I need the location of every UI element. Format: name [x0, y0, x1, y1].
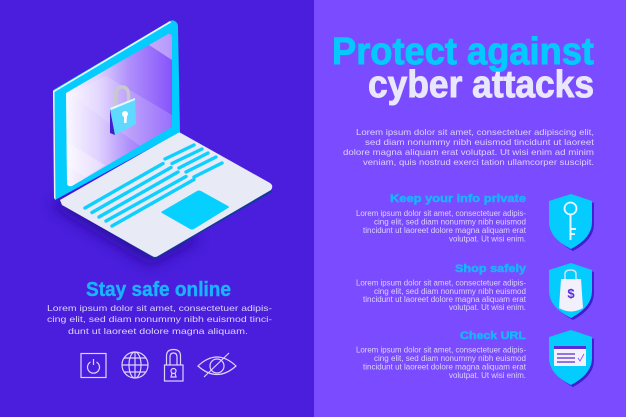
illustration: isometric laptop — [50, 20, 272, 265]
panel: left background — [0, 0, 314, 417]
text block: intro paragraph: Lorem ipsum dolor sit amet, consectetuer adipiscing elit, — [356, 127, 594, 137]
item heading: Keep your info private — [390, 193, 526, 205]
text block: left paragraph: dunt ut laoreet dolore magna aliquam. — [68, 326, 248, 336]
item: check url — [356, 330, 594, 387]
item heading: Check URL — [460, 330, 526, 342]
text block: intro paragraph: dolore magna aliquam erat volutpat. Ut wisi enim ad minim — [343, 147, 594, 157]
item text: tincidunt ut laoreet dolore magna aliquam erat — [363, 226, 527, 235]
icon: key shield — [549, 194, 594, 251]
item text: cing elit, sed diam nonummy nibh euismod — [374, 354, 526, 363]
item text: tincidunt ut laoreet dolore magna aliquam erat — [363, 362, 527, 372]
item text — [356, 209, 527, 244]
icon row — [81, 350, 236, 381]
text block: intro paragraph — [343, 127, 595, 167]
item text: tincidunt ut laoreet dolore magna aliquam erat — [363, 295, 527, 304]
text block: intro paragraph: veniam, quis nostrud exerci tation ullamcorper suscipit. — [363, 157, 594, 167]
keyboard keys — [85, 145, 222, 226]
laptop shadow — [50, 190, 200, 265]
icon: padlock on screen — [110, 87, 136, 135]
item: shop safely — [356, 263, 594, 320]
item text — [356, 278, 527, 312]
item text: Lorem ipsum dolor sit amet, consectetuer adipis- — [356, 278, 526, 288]
item text: cing elit, sed diam nonummy nibh euismod — [374, 287, 526, 296]
panel: right background — [314, 0, 626, 417]
item text: volutpat. Ut wisi enim. — [449, 303, 526, 312]
title: cyber attacks — [368, 64, 594, 106]
item text: volutpat. Ut wisi enim. — [449, 234, 526, 244]
laptop lid — [53, 20, 180, 200]
icon: shopping bag shield: $ — [567, 286, 575, 301]
trackpad — [161, 190, 229, 230]
heading: stay safe online: Stay safe online — [86, 279, 231, 301]
text block: left paragraph: cing elit, sed diam nonummy nibh euismod tinci- — [47, 314, 272, 324]
icon: browser check shield — [549, 330, 594, 387]
item text: Lorem ipsum dolor sit amet, consectetuer adipis- — [356, 346, 526, 354]
icon: globe — [122, 352, 148, 378]
item text: volutpat. Ut wisi enim. — [449, 371, 526, 380]
item heading: Shop safely — [455, 263, 527, 275]
item text — [356, 346, 527, 380]
item: keep your info private — [356, 193, 594, 251]
icon: power button — [81, 354, 106, 378]
title: Protect against — [332, 31, 594, 73]
text block: left paragraph — [47, 303, 272, 336]
lid highlight edge — [53, 21, 171, 200]
icon: crossed eye — [198, 353, 236, 377]
icon: shopping bag shield — [549, 263, 594, 320]
text block: intro paragraph: sed diam nonummy nibh euismod tincidunt ut laoreet — [365, 137, 595, 147]
text block: left paragraph: Lorem ipsum dolor sit amet, consectetuer adipis- — [47, 303, 272, 313]
icon: padlock — [164, 350, 183, 381]
laptop base — [60, 132, 272, 259]
title — [332, 31, 594, 106]
screen — [66, 34, 172, 186]
item text: Lorem ipsum dolor sit amet, consectetuer adipis- — [356, 209, 526, 218]
item text: cing elit, sed diam nonummy nibh euismod — [374, 218, 526, 226]
